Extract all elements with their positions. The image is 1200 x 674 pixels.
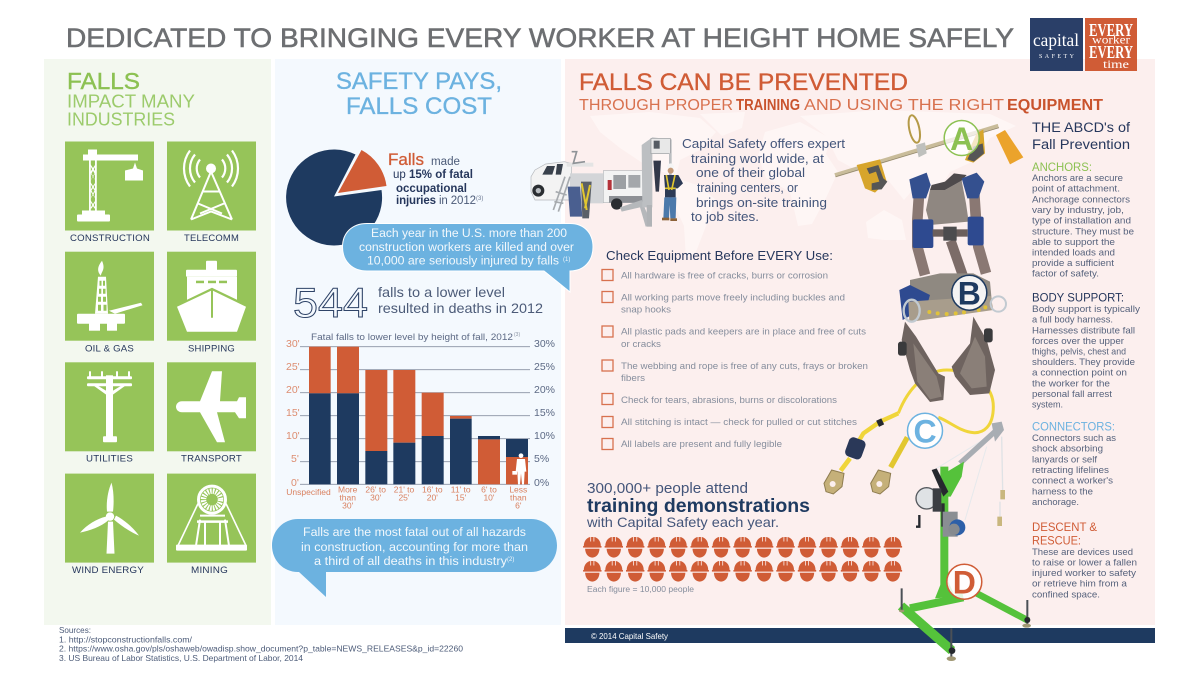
logo: Every worker every time: time [1103,57,1129,71]
section: anchors: ANCHORS: [1032,160,1092,174]
heading: impact many industries [67,92,195,130]
checkboxes [602,270,613,450]
speech bubble: construction workers [342,224,593,292]
stat: 300,000 people attend training: 300,000+ people attend [587,481,748,497]
section: connectors: Connectors such as [1032,433,1116,444]
left axis labels: 0' [291,477,299,489]
badge: D: D [953,564,976,600]
stat: 544 falls [293,279,543,326]
height category labels: Less [509,485,527,495]
section: connectors [1032,419,1116,508]
height category labels: 30' [370,492,382,502]
pictogram: hard hats [583,537,902,582]
speech bubble: construction workers: construction workers are killed and over [359,240,574,254]
subheading: through proper training and equipment: TRAINING [736,97,800,114]
section: body support [1032,291,1140,411]
text: falls made up 15 percent: injuries in 2012 [396,195,476,207]
height category labels: 16' to [422,485,443,495]
subheading: through proper training and equipment: EQUIPMENT [1007,97,1104,114]
speech bubble: most fatal hazard: (2) [507,557,514,563]
height category labels: 6' to [481,485,497,495]
text: falls made up 15 percent: occupational [396,183,467,195]
section: anchors: type of installation and [1032,216,1131,227]
section: connectors: harness to the [1032,486,1093,497]
left axis labels: 30' [286,338,300,350]
section: connectors: CONNECTORS: [1032,419,1115,433]
heading: falls: FALLS [67,68,140,94]
section: body support: Harnesses distribute fall [1032,325,1135,336]
checklist items: Check for tears, abrasions, burns or discolorations [621,395,837,406]
section: anchors: point of attachment. [1032,184,1120,195]
section: connectors: lanyards or self [1032,454,1097,465]
icon: mining headframe [167,474,256,563]
section: anchors: Anchors are a secure [1032,173,1123,184]
checklist items: or cracks [621,339,661,350]
subheading: through proper training and equipment: AND USING THE RIGHT [804,97,1005,114]
speech bubble: most fatal hazard: a third of all deaths in this industry [314,554,508,568]
heading: safety pays, falls cost: FALLS COST [346,93,492,120]
illustration: anchor beam [835,114,1023,193]
section: descent and rescue [1032,520,1137,600]
right axis labels: 10% [534,430,555,442]
sources list [59,625,463,663]
speech bubble: most fatal hazard: in construction, accounting for more than [301,540,528,554]
section: anchors: vary by industry, job, [1032,205,1124,216]
section: anchors [1032,160,1134,280]
checklist items [621,270,868,450]
bar chart: fatal falls by height [286,332,555,510]
left axis labels: 15' [286,407,300,419]
height category labels: 11' to [451,485,471,495]
label: shipping: SHIPPING [188,344,235,355]
badge: C [908,413,942,450]
section: connectors: retracting lifelines [1032,465,1109,476]
label: utilities: UTILITIES [86,454,133,465]
speech bubble: most fatal hazard [272,519,557,597]
checklist: check equipment before every use [602,248,868,450]
panel: falls impact many industries [44,59,271,625]
left axis labels: 20' [286,384,300,396]
logo: Every worker every time: EVERY [1089,20,1133,40]
text: training offer: training centers, or [697,180,799,195]
panel: falls can be prevented [565,59,1155,625]
text: training offer: Capital Safety offers expert [682,136,845,151]
subheading: through proper training and equipment: THROUGH PROPER [579,97,733,114]
label: construction: CONSTRUCTION [70,233,150,244]
section: descent and rescue: or retrieve him from a [1032,579,1128,590]
section: body support: BODY SUPPORT: [1032,291,1124,305]
heading: abcds: THE ABCD's of [1032,120,1130,135]
text: training offer [682,136,845,224]
checklist items: fibers [621,373,645,384]
height category labels: More [338,485,358,495]
checklist items: All stitching is intact — check for pulled or cut stitches [621,417,857,428]
speech bubble: construction workers: Each year in the U.S. more than 200 [371,226,567,240]
speech bubble: construction workers: 10,000 are seriously injured by falls [367,254,559,268]
text column: the ABCDs of fall prevention [1032,120,1140,600]
label: telecomm: TELECOMM [184,233,239,244]
illustration: green davit rescue arm [899,422,1031,661]
badge: A [944,120,979,157]
section: anchors: provide a sufficient [1032,258,1114,269]
badge: A: A [950,121,973,157]
pie chart: falls 15 percent [286,149,386,245]
text: falls made up 15 percent: Falls [388,150,424,169]
height category labels: Unspecified [286,487,331,497]
heading: impact many industries: INDUSTRIES [67,110,175,130]
height category labels: 26' to [365,485,386,495]
bottom bar: copyright [565,628,1155,643]
illustration: yellow lanyard and hooks [824,370,993,494]
checklist items: All labels are present and fully legible [621,439,782,450]
world map background [590,110,1016,258]
height category labels: 30' [342,500,354,510]
truck [531,152,652,227]
logo: Every worker every time [1085,18,1137,71]
section: body support: the worker for the [1032,378,1110,389]
section: connectors: anchorage. [1032,497,1079,508]
right axis labels: 15% [534,407,555,419]
section: descent and rescue: These are devices used [1032,547,1133,558]
station [642,137,672,227]
text: falls made up 15 percent: up 15% of fatal [393,169,473,181]
right axis labels: 5% [534,453,549,465]
section: body support: thighs, pelvis, chest and [1032,346,1126,357]
section: anchors: factor of safety. [1032,269,1099,280]
logo: Every worker every time: worker [1092,32,1130,46]
sources list: 2. https://www.osha.gov/pls/oshaweb/owadisp.show_document?p_table=NEWS_RELEASES&p_id=22260 [59,644,463,654]
section: body support: system. [1032,400,1063,411]
stat: 300,000 people attend training [586,481,810,530]
speech bubble: construction workers: (1) [563,257,570,263]
icon: worker silhouette [512,453,526,484]
heading: safety pays, falls cost [336,68,502,120]
section: descent and rescue: DESCENT & [1032,520,1097,534]
section: body support: personal fall arrest [1032,389,1112,400]
section: descent and rescue: confined space. [1032,589,1100,600]
speech bubble: most fatal hazard: Falls are the most fatal out of all hazards [303,525,526,539]
bottom bar: copyright: © 2014 Capital Safety [591,631,669,641]
stat: 300,000 people attend training: training demonstrations [587,496,810,517]
left axis labels [286,338,300,489]
sources list: 3. US Bureau of Labor Statistics, U.S. Department of Labor, 2014 [59,653,303,663]
checklist: check equipment before every use: Check Equipment Before EVERY Use: [606,248,833,263]
icon: ship [167,252,256,341]
illustration: training truck and station [531,137,683,227]
height category labels: 10' [483,492,495,502]
heading: impact many industries: IMPACT MANY [67,92,195,112]
height category labels [286,485,527,510]
left axis labels: 25' [286,361,300,373]
section: anchors: structure. They must be [1032,226,1134,237]
section: body support: a connection point on [1032,368,1127,379]
height category labels: than [510,492,527,502]
section: body support: Body support is typically [1032,304,1140,315]
height category labels: 15' [455,492,467,502]
checklist items: The webbing and rope is free of any cuts, frays or broken [621,361,868,372]
label: wind energy: WIND ENERGY [72,565,144,576]
left axis labels: 10' [286,430,300,442]
section: descent and rescue: injured worker to safety [1032,568,1136,579]
checklist items: All hardware is free of cracks, burrs or corrosion [621,270,828,282]
text: training offer: training world wide, at [691,151,824,166]
text: falls made up 15 percent: (3) [476,196,483,202]
height category labels: 20' [427,492,438,502]
section: body support: shoulders. They provide [1032,357,1135,368]
text: training offer: to job sites. [691,209,759,224]
icon: utility pole [65,362,154,451]
page title: DEDICATED TO BRINGING EVERY WORKER AT HEIGHT HOME SAFELY [66,23,1014,53]
height category labels: 25' [398,492,410,502]
logo: Capital Safety: SAFETY [1039,54,1075,60]
section: descent and rescue: RESCUE: [1032,533,1081,547]
stat: 544 falls: 544 [293,279,368,326]
label: mining: MINING [191,565,228,576]
icon: airplane [167,362,256,451]
stat: 544 falls: falls to a lower level [378,284,505,300]
sources list: Sources: [59,625,91,635]
stat: 544 falls: resulted in deaths in 2012 [378,300,543,316]
checklist items: snap hooks [621,304,671,316]
section: anchors: intended loads and [1032,247,1115,258]
heading: safety pays, falls cost: SAFETY PAYS, [336,68,502,95]
sources list: 1. http://stopconstructionfalls.com/ [59,634,193,644]
icon: oil and gas platform [65,252,154,341]
checklist items: All working parts move freely including buckles and [621,292,845,304]
right axis labels [534,338,555,489]
stat: 300,000 people attend training: with Capital Safety each year. [586,514,779,530]
text: falls made up 15 percent: made [431,156,460,168]
section: anchors: able to support the [1032,237,1115,248]
chart title: Fatal falls to lower level by height of fall, 2012 [311,332,513,342]
badge: D [947,564,982,600]
section: anchors: Anchorage connectors [1032,194,1130,205]
heading: falls can be prevented: FALLS CAN BE PREVENTED [579,69,908,96]
badge: B: B [958,276,981,312]
section: body support: a full body harness. [1032,315,1113,326]
label: oil and gas: OIL & GAS [85,344,134,355]
illustration: full body harness [898,173,1006,402]
left axis labels: 5' [291,453,299,465]
height category labels: than [339,492,356,502]
subheading: through proper training and equipment [579,97,1104,114]
right axis labels: 0% [534,477,549,489]
logo: Capital Safety: capital [1033,30,1079,50]
badge: C: C [913,414,937,450]
pictogram key: Each figure = 10,000 people [587,585,695,594]
height category labels: 21' to [394,485,415,495]
text: falls made up 15 percent [388,150,483,207]
logo: Every worker every time: EVERY [1089,42,1133,62]
label: transport: TRANSPORT [181,454,242,465]
text: training offer: brings on-site training [696,195,827,210]
checklist items: All plastic pads and keepers are in place and free of cuts [621,326,866,338]
section: connectors: shock absorbing [1032,444,1103,455]
heading: abcds [1032,120,1130,152]
right axis labels: 20% [534,384,555,396]
worker [662,163,683,221]
logo: Capital Safety [1030,18,1083,71]
badge: B [952,275,987,312]
right axis labels: 25% [534,361,555,373]
section: descent and rescue: to raise or lower a fallen [1032,558,1137,569]
height category labels: 6' [515,500,522,510]
panel: safety pays, falls cost [275,59,561,625]
text: training offer: one of their global [696,165,805,180]
section: connectors: connect a worker's [1032,476,1113,487]
chart title: (3) [514,332,520,338]
icon: wind turbine [65,474,154,563]
right axis labels: 30% [534,338,555,350]
section: body support: forces over the upper [1032,336,1124,347]
chart plot [300,347,530,484]
icon: construction crane [65,142,154,230]
icon: telecom tower [167,142,256,230]
heading: abcds: Fall Prevention [1032,137,1130,152]
